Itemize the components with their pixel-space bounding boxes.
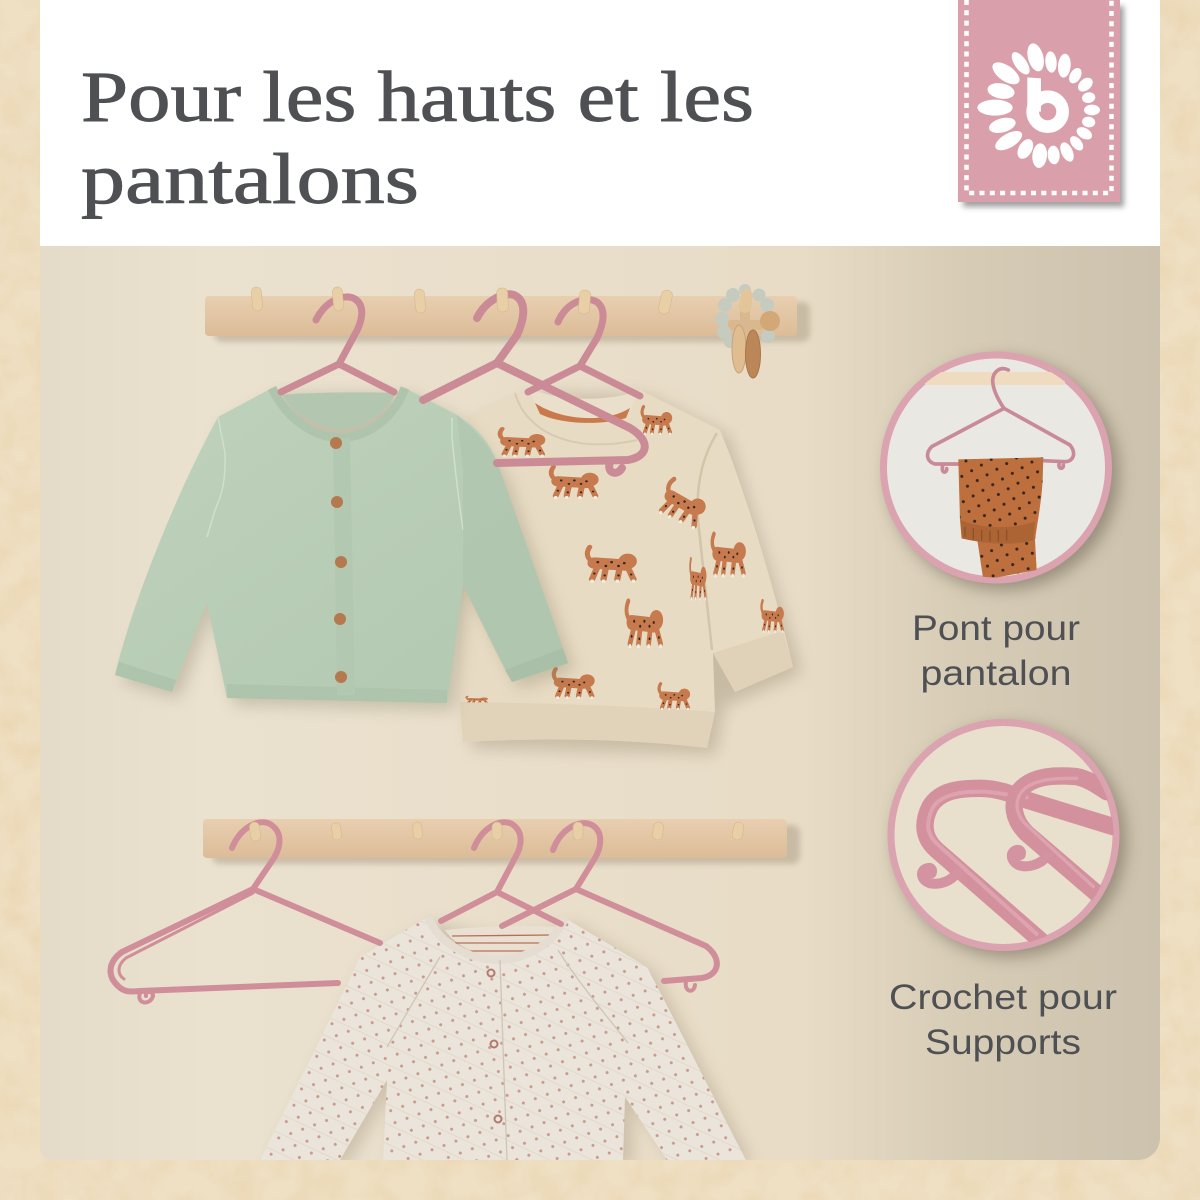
title: pantalons [81,139,419,219]
circle callout: support hook [888,719,1126,957]
logo tag [958,0,1124,207]
bottom wooden rack [203,819,800,864]
white header band [40,0,1160,246]
circle callout: pant bridge [880,352,1119,590]
label: support hook: Crochet pour [889,978,1117,1017]
label: pant bridge: pantalon [920,654,1072,693]
photo panel [40,246,1160,1165]
top wooden rack [205,296,810,342]
snap buttons [488,970,502,1122]
wooden teether toy [715,284,780,378]
bottom quilted cardigan [260,917,753,1165]
bottom pink hangers [111,822,717,1002]
title: Pour les hauts et les [81,57,754,137]
top pink hangers [281,294,645,473]
label: pant bridge: Pont pour [912,609,1080,648]
wooden buttons [330,437,347,683]
wooden pegs [249,287,744,842]
beige leopard sweatshirt [458,388,802,754]
label: support hook: Supports [925,1023,1081,1062]
green knit cardigan [115,388,575,710]
